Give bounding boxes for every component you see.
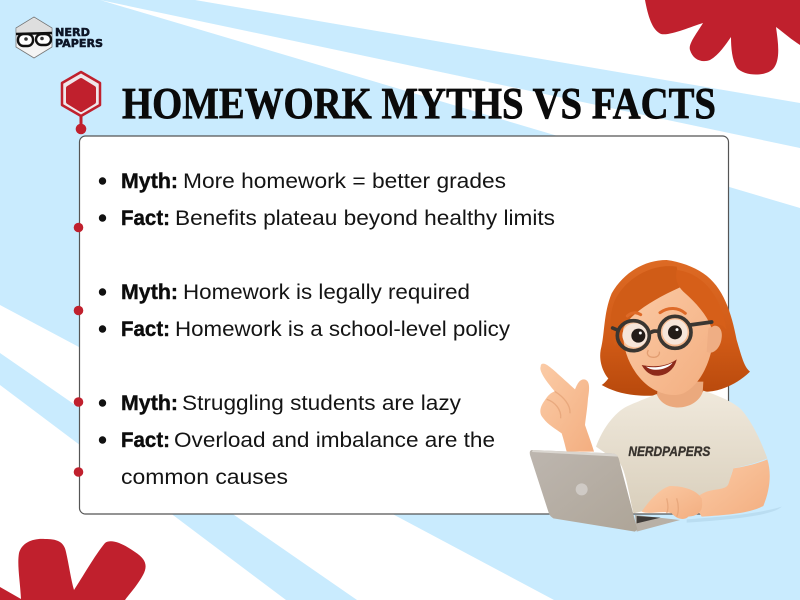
logo text: PAPERS — [55, 37, 103, 50]
illustration: student with laptop — [530, 260, 782, 532]
myth and fact list 2: Myth: — [121, 280, 178, 304]
glasses — [613, 316, 712, 351]
myth and fact list 1: Fact: — [121, 206, 170, 230]
finger creases — [547, 391, 570, 418]
neck — [657, 382, 703, 409]
face — [623, 280, 714, 395]
shirt — [596, 391, 767, 513]
logo icon: hexagon with glasses — [16, 17, 52, 58]
myth and fact list 2 — [99, 280, 510, 341]
myth and fact list 1 — [99, 169, 555, 230]
myth and fact list 1: More homework = better grades — [183, 169, 506, 193]
myth and fact list 3: Overload and imbalance are the — [174, 428, 495, 452]
myth and fact list 3: Struggling students are lazy — [182, 391, 461, 415]
myth and fact list 2: Fact: — [121, 317, 170, 341]
myth and fact list 2: Homework is legally required — [183, 280, 470, 304]
hair front — [611, 266, 680, 347]
desk shadow — [687, 507, 782, 523]
hair back — [600, 260, 750, 396]
eyebrows — [627, 308, 685, 316]
card panel — [80, 136, 728, 514]
left arm and pointing hand — [540, 364, 594, 452]
mouth — [642, 359, 677, 376]
right arm — [696, 459, 770, 517]
myth and fact list 1: Myth: — [121, 169, 178, 193]
myth and fact list 3: Fact: — [121, 428, 170, 452]
myth and fact list 3: common causes — [121, 465, 288, 489]
timeline dots — [74, 223, 83, 477]
logo text: NERD — [55, 26, 90, 39]
shirt text: NERDPAPERS — [628, 444, 710, 459]
hexagon title marker — [62, 72, 100, 134]
myth and fact list 2: Homework is a school-level policy — [175, 317, 510, 341]
typing hand — [642, 486, 702, 519]
logo: Nerd Papers — [16, 17, 103, 58]
myth and fact list 3: Myth: — [121, 391, 178, 415]
logo text — [55, 26, 103, 50]
ear — [707, 326, 722, 353]
myth and fact list 1: Benefits plateau beyond healthy limits — [175, 206, 555, 230]
eyes — [622, 323, 648, 347]
decorative red shape: bottom left — [0, 539, 146, 600]
title: HOMEWORK MYTHS VS FACTS — [122, 79, 716, 128]
myth and fact list 3 — [99, 391, 495, 489]
laptop — [530, 450, 680, 532]
decorative red shape: top right — [645, 0, 800, 75]
nose — [647, 350, 659, 357]
